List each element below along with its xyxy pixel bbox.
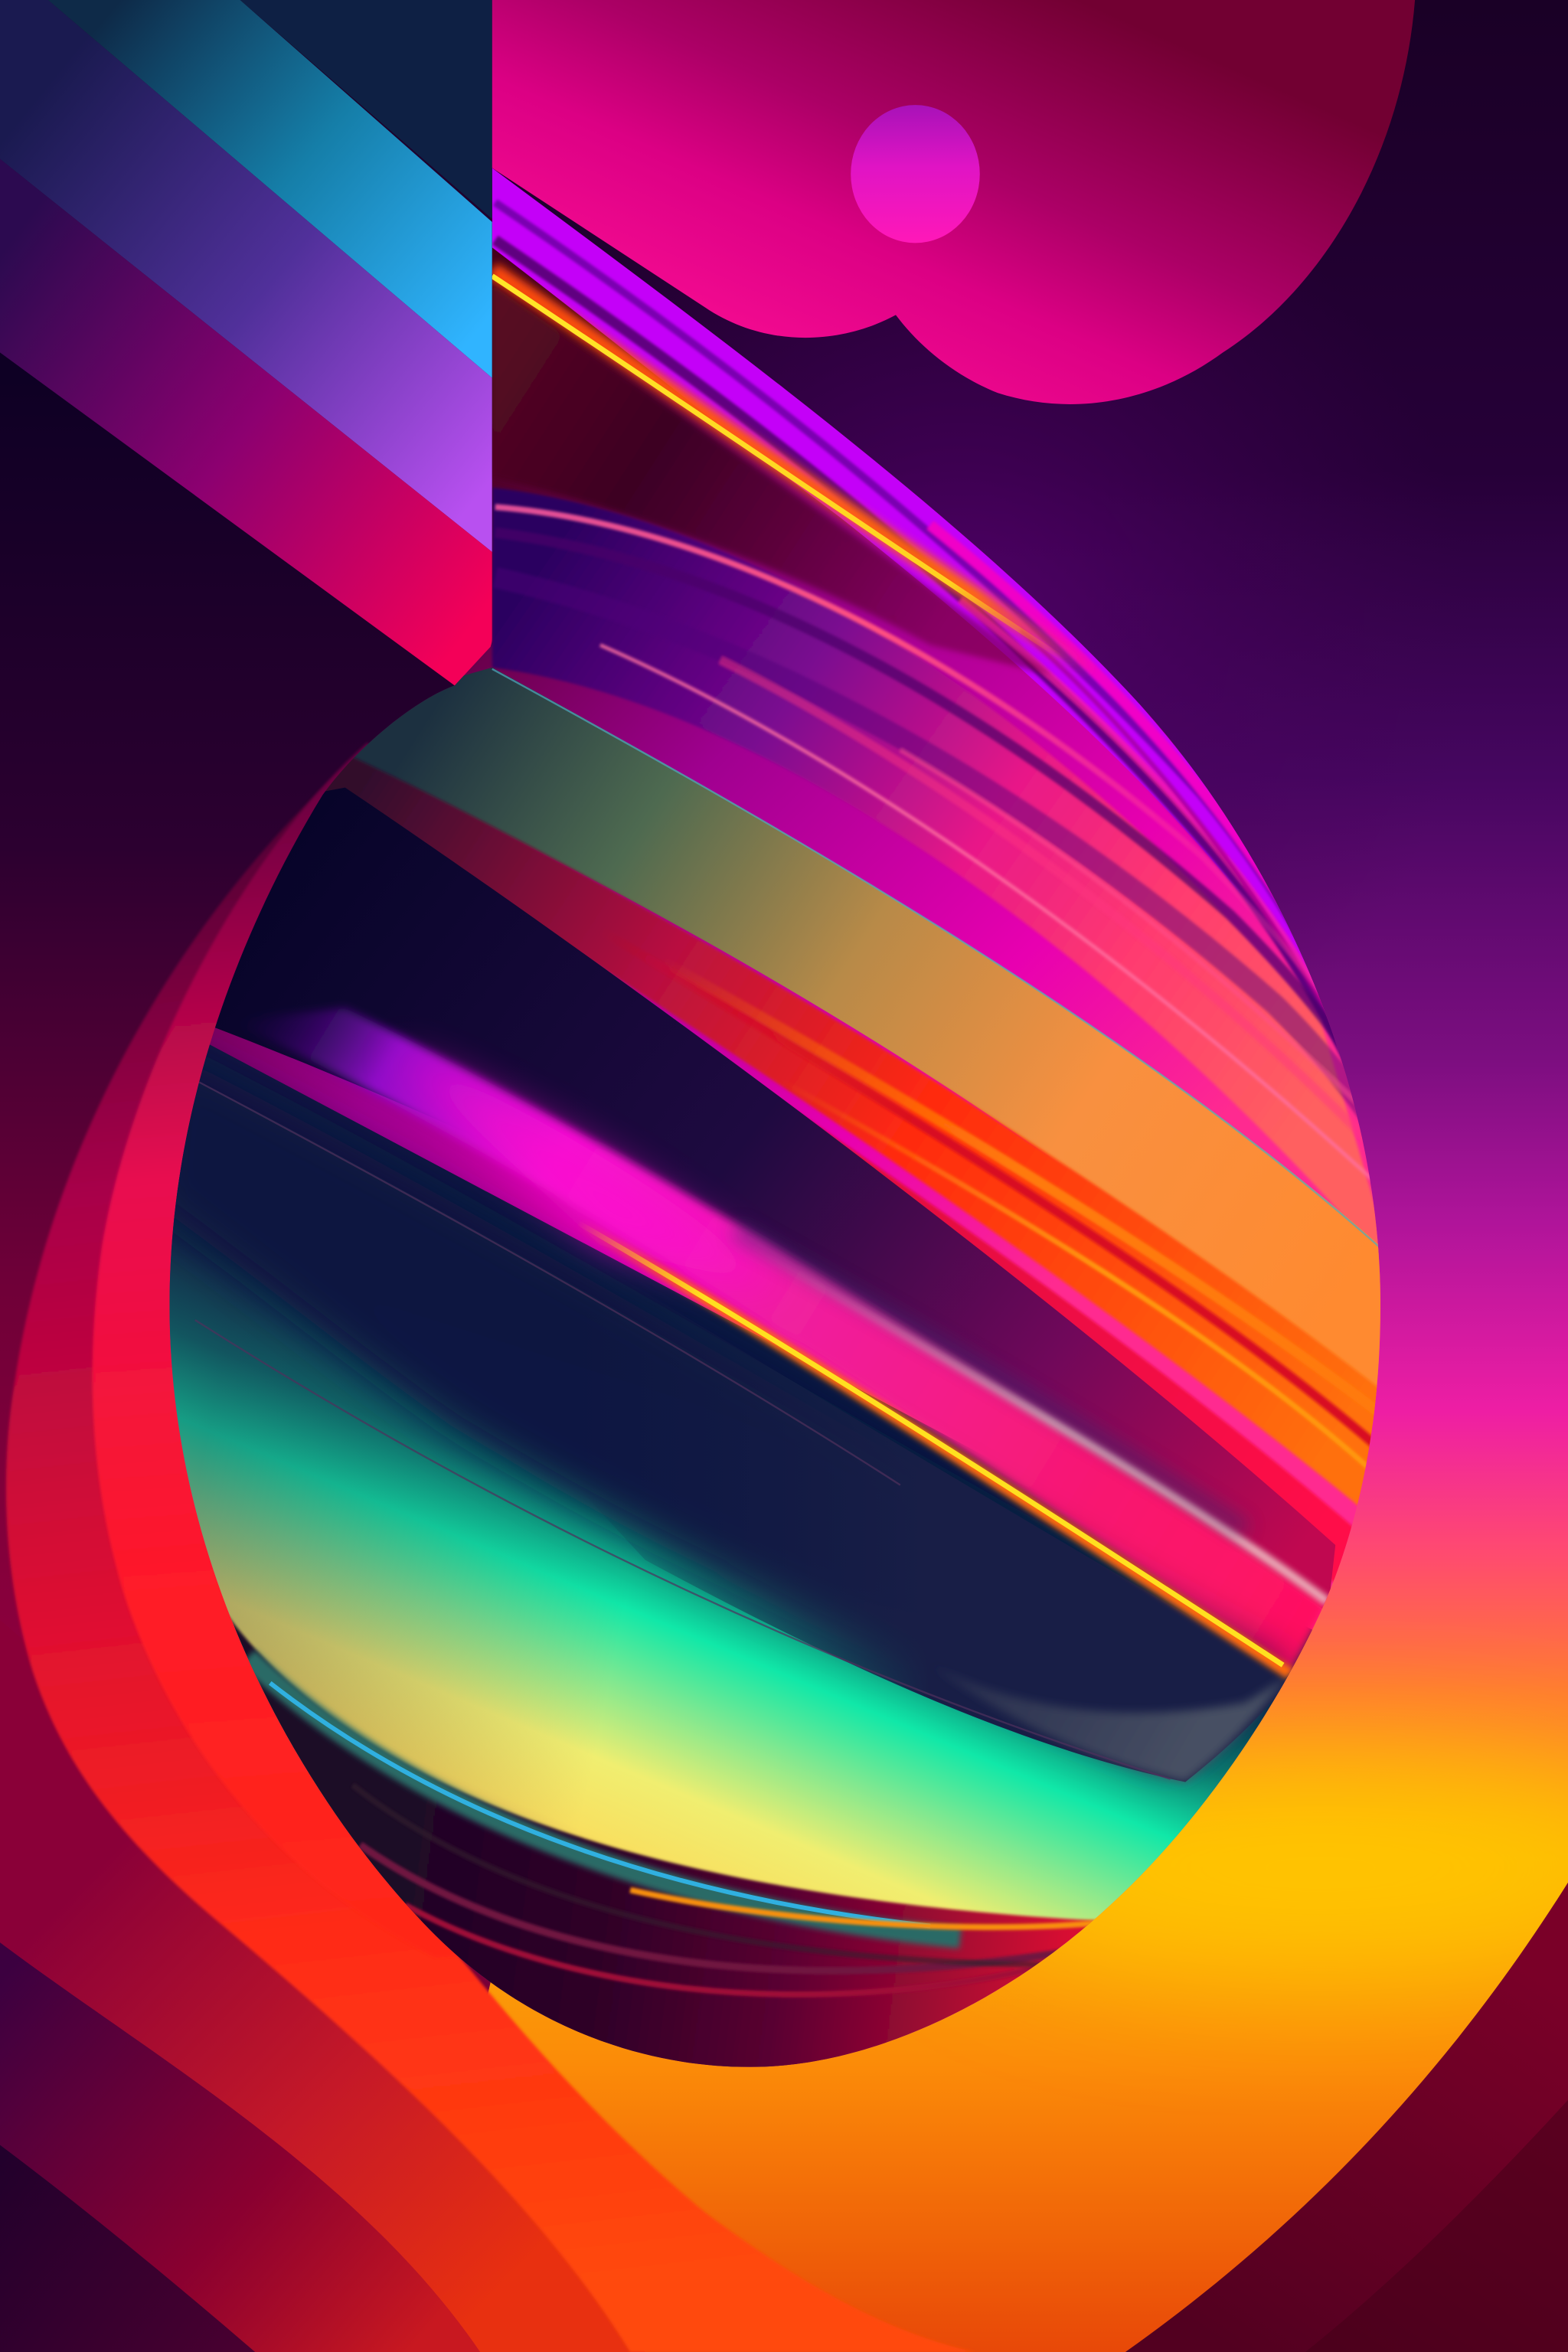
top-left crimson band [0, 159, 492, 685]
glowing yellow line [492, 270, 1096, 675]
inner bright ring [93, 743, 600, 1958]
top-left violet band [0, 0, 492, 552]
soft navy into teal [150, 1050, 1290, 1762]
orange rib lines [600, 930, 1396, 1492]
upper stripes: violet edge [492, 168, 1351, 1035]
bottom dark stripes [150, 1590, 1140, 2100]
yellow glow [975, 1762, 1568, 1972]
red-orange band [315, 750, 1388, 1530]
outer crimson ring [6, 693, 975, 2352]
faint diagonal lines [195, 1080, 1171, 1779]
dark navy band [195, 788, 1335, 1612]
upper dark wedge [492, 285, 1050, 675]
green-to-orange band [345, 668, 1388, 1440]
top-left blue band [48, 0, 492, 378]
pale silver streak [750, 1245, 1328, 1602]
upper stripes: dark ribbing [492, 198, 1343, 1066]
bottom-right dark corner [1125, 1883, 1568, 2352]
bottom-left layered curves [0, 1942, 480, 2352]
teal and blue bottom stripe [247, 1658, 1096, 1938]
grey lower band edge [930, 1665, 1288, 1782]
lower iridescent field [135, 1005, 1351, 2100]
magenta purple glow streak [225, 1008, 1328, 1674]
dark left field [0, 348, 600, 2160]
crimson band [255, 788, 1365, 1590]
bottom ribs [353, 1785, 1080, 1994]
magenta circle [851, 105, 980, 243]
upper pink and purple arcs [492, 488, 1396, 1275]
crisp navy band [210, 1035, 1290, 1782]
upper stripes: base [150, 150, 1410, 2100]
yellow-orange streak line [578, 1223, 1290, 1674]
top-left dark triangle [240, 0, 492, 219]
fold layer beneath ring [0, 1620, 645, 2352]
blue edge highlight [492, 669, 1380, 1248]
striped sphere [135, 150, 1410, 2100]
top-right magenta blob [492, 0, 1415, 404]
